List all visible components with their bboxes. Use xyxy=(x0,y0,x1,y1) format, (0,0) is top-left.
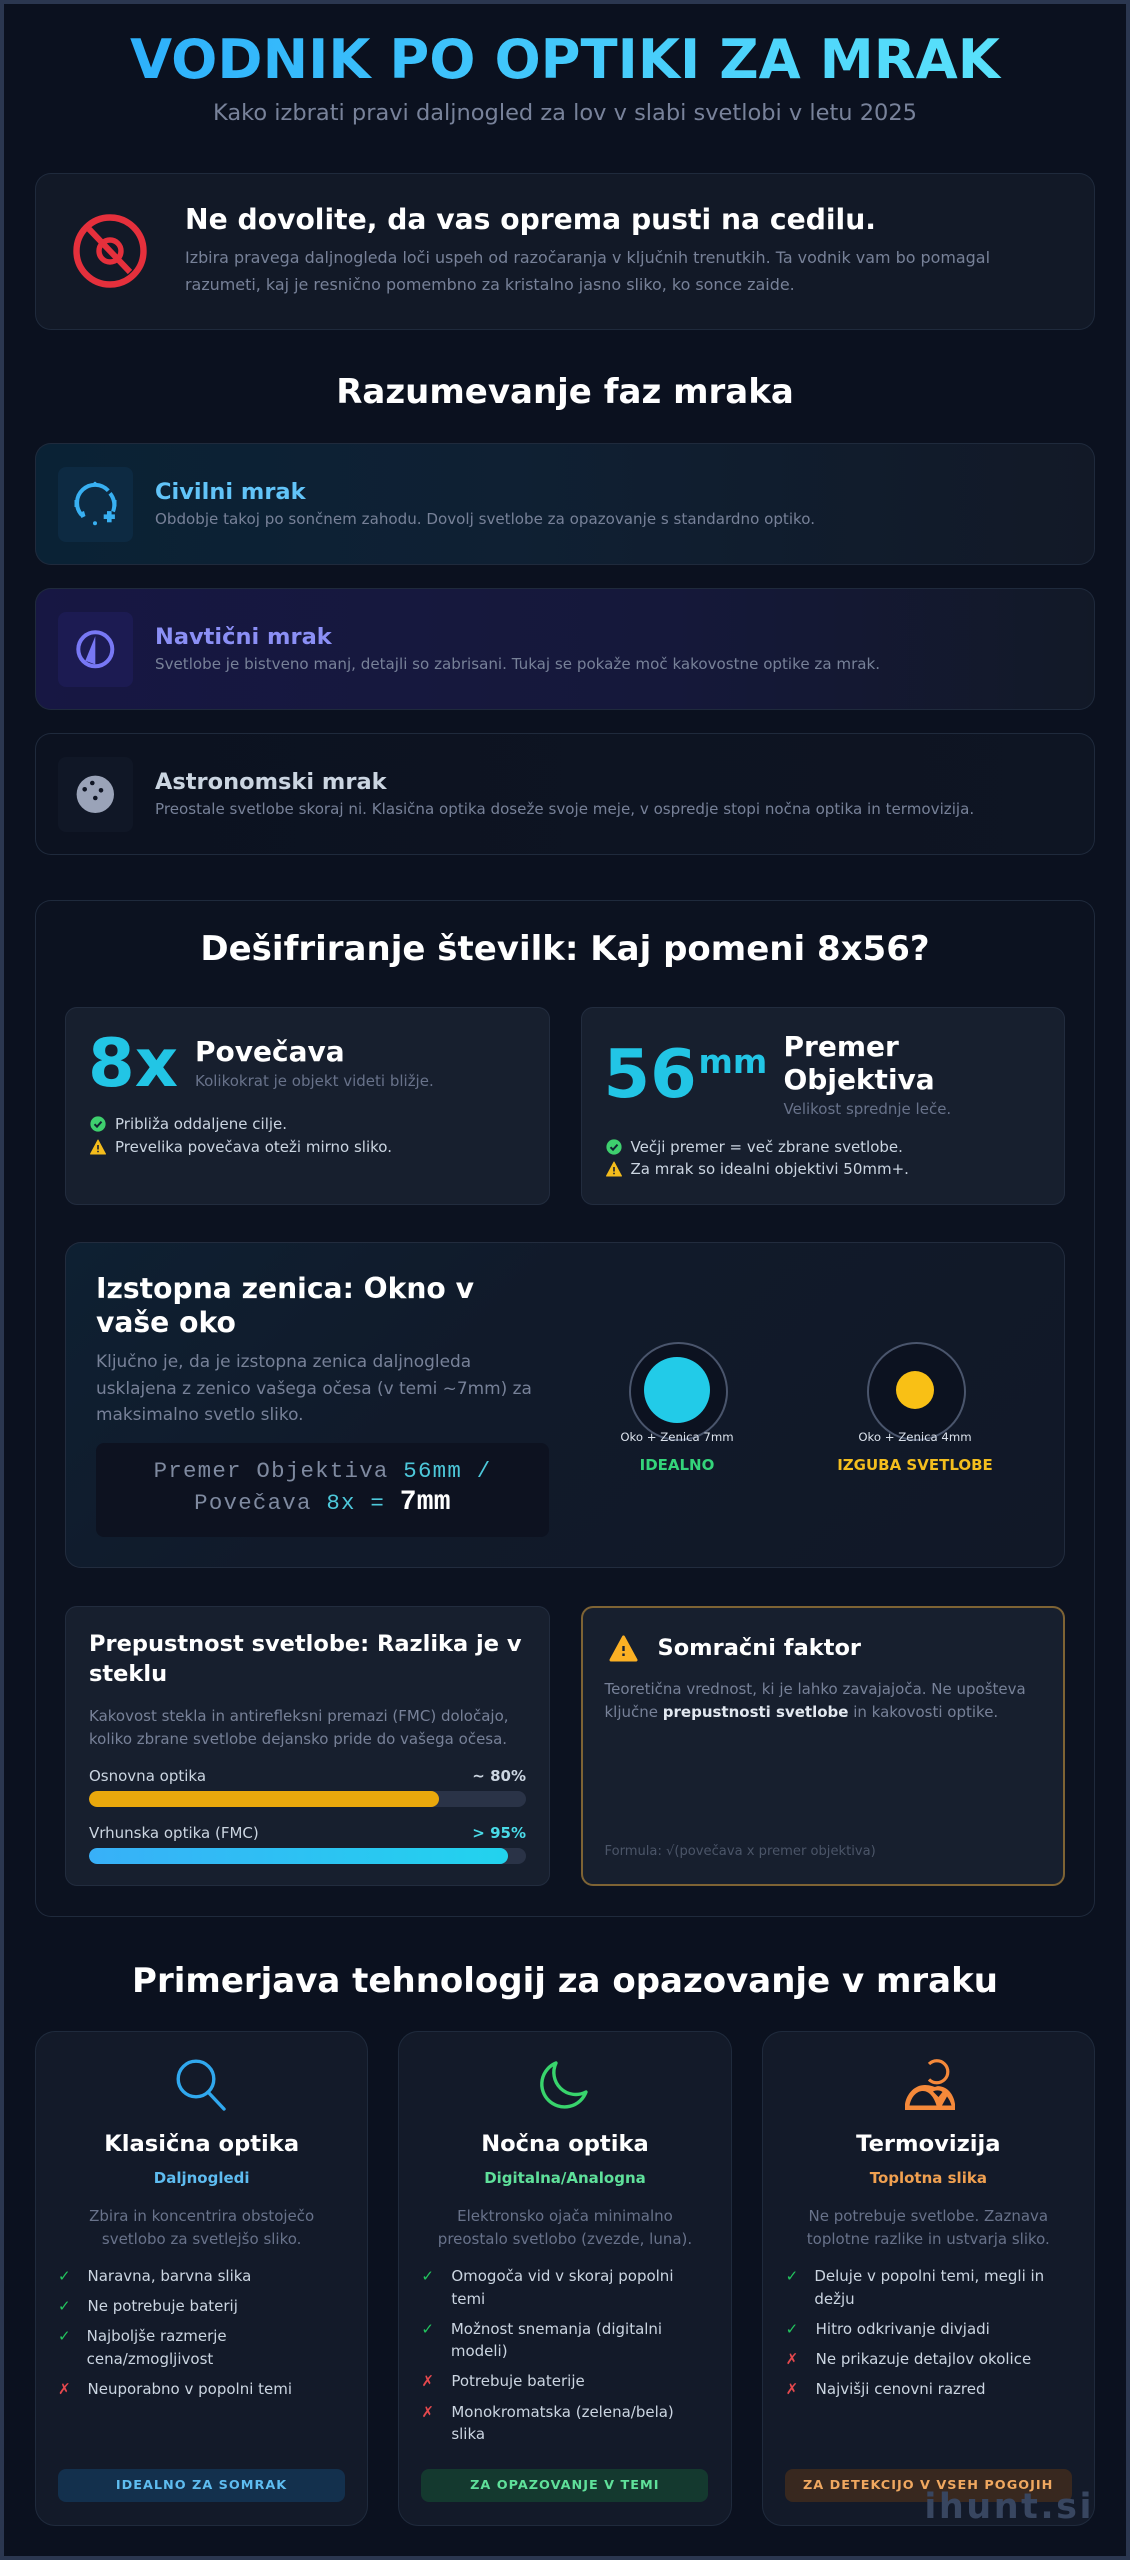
bar chart: basic optics xyxy=(89,1767,526,1807)
intro text: razumeti, kaj je resnično pomembno za kristalno jasno sliko, ko sonce zaide. xyxy=(185,275,795,294)
description: Ne potrebuje svetlobe. Zaznava xyxy=(809,2207,1048,2225)
list item: temi xyxy=(451,2290,485,2308)
list item: Omogoča vid v skoraj popolni xyxy=(451,2267,674,2285)
intro text: Izbira pravega daljnogleda loči uspeh od razočaranja v ključnih trenutkih. Ta vodnik vam bo pomagal xyxy=(185,248,990,267)
list item: Hitro odkrivanje divjadi xyxy=(816,2320,990,2338)
formula text xyxy=(154,1458,491,1518)
heading: objective diameter: Objektiva xyxy=(784,1063,935,1096)
bar fill xyxy=(89,1848,508,1864)
list item: ✓ xyxy=(58,2327,71,2345)
heading: phases: Razumevanje faz mraka xyxy=(336,372,794,412)
description: toplotne razlike in ustvarja sliko. xyxy=(807,2230,1050,2248)
panel: astronomical twilight xyxy=(35,733,1095,855)
list item: ✓ xyxy=(786,2267,798,2285)
bar track xyxy=(89,1791,526,1807)
text: magnification: Kolikokrat je objekt videti bližje. xyxy=(195,1072,434,1090)
diagram: ideal pupil xyxy=(620,1342,734,1474)
heading: thermal: Termovizija xyxy=(856,2131,1000,2157)
text: twilight factor xyxy=(604,1680,1026,1721)
list item: ✓ xyxy=(58,2297,71,2315)
formula note: Formula: √(povečava x premer objektiva) xyxy=(604,1844,876,1859)
list item: Ne prikazuje detajlov okolice xyxy=(816,2350,1031,2368)
intro text xyxy=(185,248,990,294)
text: civil twilight: Obdobje takoj po sončnem zahodu. Dovolj svetlobe za opazovanje s standardno optiko. xyxy=(155,510,815,528)
formula text: Premer Objektiva 56mm / xyxy=(154,1458,491,1484)
list item: ✓ xyxy=(786,2320,798,2338)
icon: astronomical twilight xyxy=(58,757,133,832)
description: Elektronsko ojača minimalno xyxy=(457,2207,673,2225)
panel: nautical twilight xyxy=(35,588,1095,710)
bullet: pro: Približa oddaljene cilje. xyxy=(115,1115,287,1133)
list item: ✗ xyxy=(786,2380,798,2398)
bullet: pro: Večji premer = več zbrane svetlobe. xyxy=(630,1138,903,1156)
unit mm: mm xyxy=(698,1042,767,1081)
icon: moon xyxy=(540,2061,588,2109)
title: VODNIK PO OPTIKI ZA MRAK xyxy=(130,28,1000,91)
text: twilight factor: ključne prepustnosti svetlobe in kakovosti optike. xyxy=(604,1703,998,1721)
icon: no symbol xyxy=(73,214,147,288)
heading: exit pupil: Izstopna zenica: Okno v xyxy=(96,1272,474,1305)
pupil 7mm xyxy=(644,1357,710,1423)
card: light transmission xyxy=(65,1606,550,1886)
panel: thermal xyxy=(762,2031,1095,2526)
card: magnification xyxy=(65,1007,550,1205)
list item xyxy=(58,2327,227,2368)
list item: Neuporabno v popolni temi xyxy=(88,2380,292,2398)
panel: classic optics xyxy=(35,2031,368,2526)
list item: slika xyxy=(451,2425,485,2443)
panel: intro xyxy=(35,173,1095,330)
heading: nautical twilight: Navtični mrak xyxy=(155,624,332,650)
text: light transmission: Kakovost stekla in antirefleksni premazi (FMC) določajo, xyxy=(89,1707,509,1725)
text: exit pupil xyxy=(96,1351,532,1424)
badge xyxy=(785,2469,1072,2502)
badge: IDEALNO ZA SOMRAK xyxy=(116,2478,287,2493)
icon: nautical twilight xyxy=(58,612,133,686)
bar track xyxy=(89,1848,526,1864)
bar chart: premium optics xyxy=(89,1824,526,1864)
formula box xyxy=(96,1443,549,1537)
status: ideal: IDEALNO xyxy=(640,1456,714,1474)
badge xyxy=(421,2469,708,2502)
list item xyxy=(421,2320,662,2360)
text: exit pupil: maksimalno svetlo sliko. xyxy=(96,1404,304,1424)
list item: ✓ xyxy=(421,2267,434,2285)
icon: warning xyxy=(610,1635,638,1662)
bullet: warning: Za mrak so idealni objektivi 50mm+. xyxy=(630,1160,909,1178)
eye ring xyxy=(866,1342,966,1440)
diagram: light loss xyxy=(837,1342,993,1474)
text: objective diameter: Velikost sprednje leče. xyxy=(784,1100,951,1118)
caption: Oko + Zenica 7mm xyxy=(620,1430,734,1444)
text: astronomical twilight: Preostale svetlobe skoraj ni. Klasična optika doseže svoje meje, v ospredje stopi nočna optika in termovizija. xyxy=(155,800,974,818)
card: objective diameter xyxy=(580,1007,1065,1205)
watermark: ihunt.si xyxy=(924,2487,1094,2527)
badge: ZA DETEKCIJO V VSEH POGOJIH xyxy=(803,2478,1053,2493)
heading: light transmission xyxy=(89,1631,522,1687)
list item: Možnost snemanja (digitalni xyxy=(451,2320,662,2338)
text: light transmission: koliko zbrane svetlobe dejansko pride do vašega očesa. xyxy=(89,1730,507,1748)
value: ~ 80% xyxy=(472,1767,526,1785)
description: Zbira in koncentrira obstoječo xyxy=(89,2207,314,2225)
heading: civil twilight: Civilni mrak xyxy=(155,479,306,505)
list item: Ne potrebuje baterij xyxy=(88,2297,238,2315)
card: exit pupil xyxy=(65,1242,1065,1568)
list item: Potrebuje baterije xyxy=(451,2372,585,2390)
icon: magnifier xyxy=(176,2060,226,2111)
description: preostalo svetlobo (zvezde, luna). xyxy=(438,2230,692,2248)
list item: Deluje v popolni temi, megli in xyxy=(814,2267,1044,2285)
heading: light transmission: Prepustnost svetlobe: Razlika je v xyxy=(89,1631,522,1657)
description xyxy=(89,2207,314,2248)
text: nautical twilight: Svetlobe je bistveno manj, detajli so zabrisani. Tukaj se pokaže moč kakovostne optike za mrak. xyxy=(155,654,880,672)
big number 56: 56 xyxy=(604,1035,697,1113)
heading: objective diameter: Premer xyxy=(784,1030,899,1063)
heading: exit pupil: vaše oko xyxy=(96,1306,236,1339)
eye ring xyxy=(628,1342,728,1440)
text: exit pupil: Ključno je, da je izstopna zenica daljnogleda xyxy=(96,1351,471,1371)
text: exit pupil: usklajena z zenico vašega očesa (v temi ~7mm) za xyxy=(96,1378,532,1398)
list item xyxy=(421,2402,674,2443)
card: twilight factor xyxy=(580,1606,1065,1886)
heading: classic optics: Klasična optika xyxy=(104,2131,299,2157)
heading: objective diameter xyxy=(784,1030,935,1096)
heading: decoding numbers: Dešifriranje številk: Kaj pomeni 8x56? xyxy=(200,929,930,969)
heading: astronomical twilight: Astronomski mrak xyxy=(155,769,387,795)
heading: technology comparison: Primerjava tehnologij za opazovanje v mraku xyxy=(132,1961,998,2001)
list item: ✗ xyxy=(421,2402,434,2420)
icon: thermal person xyxy=(905,2059,955,2110)
list item: modeli) xyxy=(451,2342,508,2360)
list item: ✗ xyxy=(786,2350,798,2368)
status: light loss: IZGUBA SVETLOBE xyxy=(837,1456,993,1474)
list item xyxy=(786,2267,1044,2308)
panel: night vision xyxy=(398,2031,732,2526)
list item: Naravna, barvna slika xyxy=(88,2267,251,2285)
icon: civil twilight xyxy=(58,467,133,542)
list item: Najboljše razmerje xyxy=(87,2327,227,2345)
list item: ✗ xyxy=(58,2380,71,2398)
caption: Oko + Zenica 4mm xyxy=(858,1430,972,1444)
list item: Najvišji cenovni razred xyxy=(816,2380,986,2398)
value: > 95% xyxy=(472,1824,526,1842)
heading: twilight factor: Somračni faktor xyxy=(658,1635,861,1661)
subheading: Digitalna/Analogna xyxy=(484,2169,646,2187)
label: Osnovna optika xyxy=(89,1767,206,1785)
list item: dežju xyxy=(814,2290,855,2308)
label: Vrhunska optika (FMC) xyxy=(89,1824,259,1842)
description xyxy=(438,2207,692,2248)
bar fill xyxy=(89,1791,439,1807)
description xyxy=(807,2207,1050,2248)
badge: ZA OPAZOVANJE V TEMI xyxy=(470,2478,660,2493)
text: twilight factor: Teoretična vrednost, ki je lahko zavajajoča. Ne upošteva xyxy=(604,1680,1026,1698)
subtitle: Kako izbrati pravi daljnogled za lov v slabi svetlobi v letu 2025 xyxy=(213,100,917,126)
heading: magnification: Povečava xyxy=(195,1035,345,1068)
pupil 4mm xyxy=(896,1371,934,1409)
list item: ✓ xyxy=(421,2320,434,2338)
big number 8x: 8x xyxy=(88,1024,178,1102)
badge xyxy=(58,2469,345,2502)
list item xyxy=(421,2267,674,2308)
formula text: Povečava 8x = 7mm xyxy=(194,1487,451,1518)
heading: light transmission: steklu xyxy=(89,1661,167,1687)
intro heading: Ne dovolite, da vas oprema pusti na cedilu. xyxy=(185,203,876,236)
list item: ✓ xyxy=(58,2267,71,2285)
heading: night vision: Nočna optika xyxy=(481,2131,649,2157)
subheading: Daljnogledi xyxy=(154,2169,250,2187)
list item: cena/zmogljivost xyxy=(87,2350,213,2368)
bullet: warning: Prevelika povečava oteži mirno sliko. xyxy=(115,1138,392,1156)
list item: ✗ xyxy=(421,2372,434,2390)
text: light transmission xyxy=(89,1707,509,1748)
description: svetlobo za svetlejšo sliko. xyxy=(102,2230,301,2248)
panel: decoding numbers xyxy=(35,900,1095,1917)
list item: Monokromatska (zelena/bela) xyxy=(451,2402,674,2420)
heading: exit pupil xyxy=(96,1272,474,1339)
subheading: Toplotna slika xyxy=(870,2169,987,2187)
panel: civil twilight xyxy=(35,443,1095,565)
